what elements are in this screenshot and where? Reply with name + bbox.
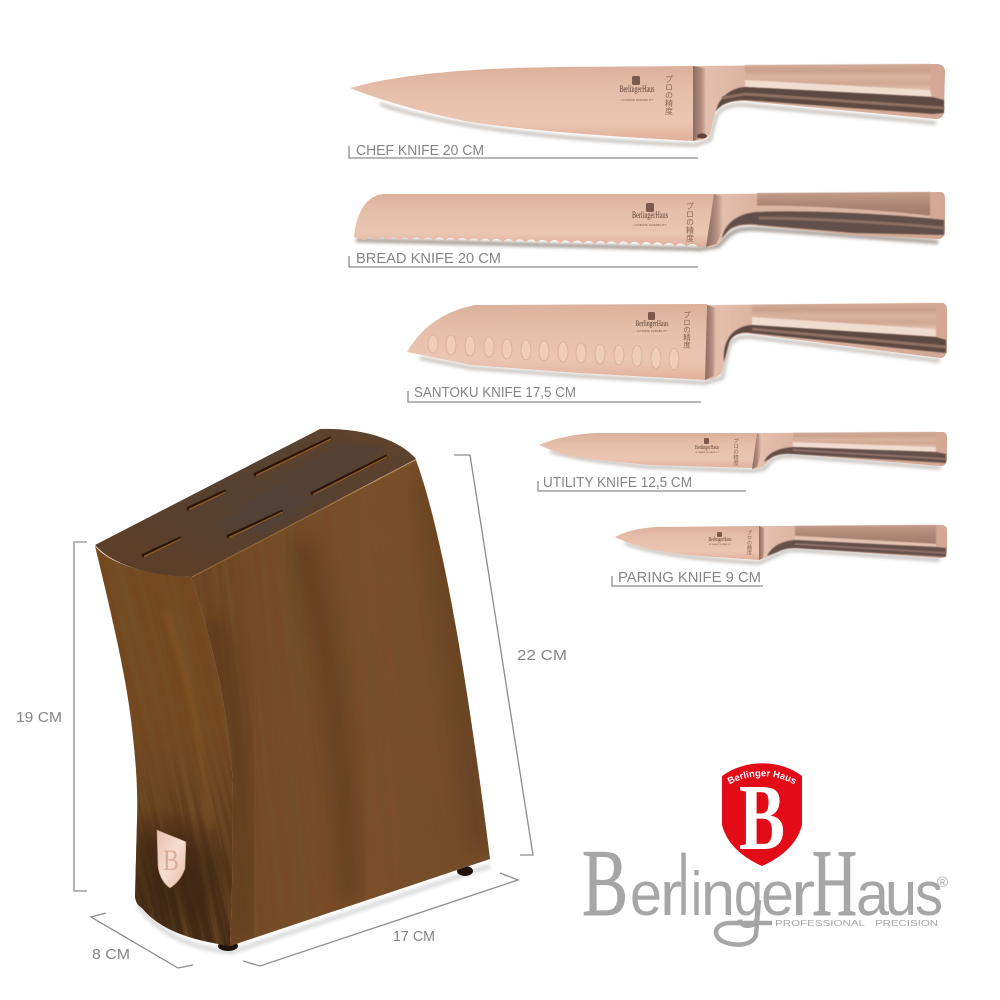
knife slots bbox=[142, 438, 387, 556]
handle bbox=[693, 64, 945, 141]
blade marks bbox=[632, 202, 694, 243]
dark handle band bbox=[716, 87, 944, 114]
red shield: Berlinger Haus bbox=[727, 770, 796, 784]
blade marks: BerlingerHaus bbox=[636, 318, 668, 328]
label bbox=[349, 143, 698, 159]
wordmark: r bbox=[660, 860, 682, 929]
blade marks: プロの精度 bbox=[732, 438, 739, 467]
wordmark: g bbox=[734, 860, 763, 929]
handle bbox=[705, 303, 947, 380]
wordmark: e bbox=[630, 860, 662, 929]
front face bbox=[191, 460, 490, 946]
blade marks bbox=[620, 75, 674, 116]
blade marks: ULTIMATE DURABILITY bbox=[709, 543, 732, 546]
blade marks: ULTIMATE DURABILITY bbox=[621, 98, 653, 102]
label: UTILITY KNIFE 12,5 CM bbox=[543, 475, 692, 491]
blade marks: ULTIMATE DURABILITY bbox=[695, 451, 720, 454]
blade bbox=[615, 526, 759, 560]
wordmark bbox=[582, 830, 943, 936]
handle top zone bbox=[795, 525, 936, 544]
dimension: 8 cm: 8 CM bbox=[92, 946, 130, 963]
dimension: 22 cm: 22 CM bbox=[517, 647, 567, 664]
dimension: 17 cm: 17 CM bbox=[393, 928, 435, 945]
dimension: 17 cm bbox=[243, 873, 518, 966]
tagline bbox=[775, 918, 938, 928]
blade marks: ULTIMATE DURABILITY bbox=[637, 329, 667, 333]
serrated blade bbox=[354, 194, 715, 247]
wooden knife block bbox=[95, 428, 492, 956]
label: CHEF KNIFE 20 CM bbox=[356, 143, 484, 159]
edge highlight bbox=[192, 460, 416, 577]
side face bbox=[95, 546, 233, 946]
handle bbox=[752, 432, 947, 469]
wordmark: H bbox=[812, 830, 857, 936]
dimension: 22 cm bbox=[454, 455, 567, 855]
wordmark: i bbox=[691, 860, 702, 929]
dark handle band bbox=[722, 211, 944, 238]
blade marks bbox=[695, 438, 739, 467]
bright stripe bbox=[793, 442, 936, 452]
handle top zone bbox=[793, 432, 936, 447]
blade marks: BerlingerHaus bbox=[695, 444, 719, 451]
blade marks: BerlingerHaus bbox=[632, 210, 668, 220]
blade marks: プロの精度 bbox=[664, 75, 674, 116]
rose gold badge: B bbox=[163, 844, 179, 877]
label bbox=[349, 251, 698, 267]
Berlinger Haus logo bbox=[582, 763, 948, 947]
bolster bbox=[705, 305, 717, 380]
label: PARING KNIFE 9 CM bbox=[618, 570, 761, 586]
tagline: PROFESSIONAL bbox=[775, 918, 865, 928]
rose gold badge bbox=[157, 830, 186, 888]
top face bbox=[95, 429, 416, 577]
blade marks: プロの精度 bbox=[746, 530, 752, 556]
dimension: 8 cm bbox=[91, 913, 193, 968]
blade marks: BerlingerHaus bbox=[620, 84, 655, 94]
blade bbox=[350, 66, 694, 141]
bolster bbox=[693, 66, 707, 141]
dark handle band bbox=[767, 540, 946, 557]
wordmark: r bbox=[791, 860, 815, 929]
bright stripe bbox=[745, 80, 932, 97]
blade bbox=[539, 433, 757, 468]
blade marks: プロの精度 bbox=[682, 311, 692, 350]
handle top zone bbox=[745, 64, 930, 90]
blade marks: プロの精度 bbox=[686, 202, 694, 243]
knife: santoku knife bbox=[407, 303, 947, 402]
bolster bbox=[752, 433, 762, 469]
top face grey patch bbox=[215, 444, 385, 535]
dimension: 19 cm bbox=[16, 542, 87, 891]
handle bbox=[759, 525, 947, 560]
knife: bread knife bbox=[349, 192, 945, 267]
knife: paring knife bbox=[612, 525, 947, 586]
dark handle band bbox=[764, 447, 946, 463]
dimples bbox=[428, 335, 679, 370]
bolster bbox=[759, 526, 765, 560]
wordmark: l bbox=[678, 838, 689, 934]
wordmark: e bbox=[761, 860, 794, 929]
wordmark: n bbox=[701, 860, 735, 929]
feet bbox=[218, 866, 473, 951]
wordmark: a bbox=[856, 860, 889, 929]
soft floor shadow bbox=[138, 866, 490, 952]
handle bbox=[706, 192, 945, 247]
label: BREAD KNIFE 20 CM bbox=[356, 251, 501, 267]
label bbox=[408, 385, 701, 402]
slot inner wood bbox=[144, 439, 387, 556]
bright stripe bbox=[752, 317, 936, 337]
handle top zone bbox=[752, 303, 936, 329]
dimension: 19 cm: 19 CM bbox=[16, 709, 62, 726]
g swash bbox=[716, 900, 772, 945]
blade marks bbox=[636, 311, 692, 350]
label: SANTOKU KNIFE 17,5 CM bbox=[414, 385, 576, 401]
bright stripe bbox=[795, 536, 936, 547]
red shield: B bbox=[739, 766, 785, 870]
wordmark: s bbox=[915, 860, 943, 929]
registered mark: ® bbox=[937, 874, 948, 891]
tagline: PRECISION bbox=[875, 918, 938, 928]
blade marks bbox=[708, 530, 752, 556]
bolster bbox=[706, 194, 724, 247]
dark handle band bbox=[724, 325, 946, 362]
knife: utility knife bbox=[538, 432, 947, 491]
blade bbox=[407, 304, 707, 380]
bright stripe bbox=[757, 206, 930, 219]
blade marks: ULTIMATE DURABILITY bbox=[634, 223, 666, 227]
blade marks: BerlingerHaus bbox=[708, 536, 732, 543]
knife: chef knife bbox=[349, 64, 945, 159]
wordmark: B bbox=[582, 830, 628, 936]
wordmark: u bbox=[885, 860, 917, 929]
handle top zone bbox=[757, 192, 930, 216]
